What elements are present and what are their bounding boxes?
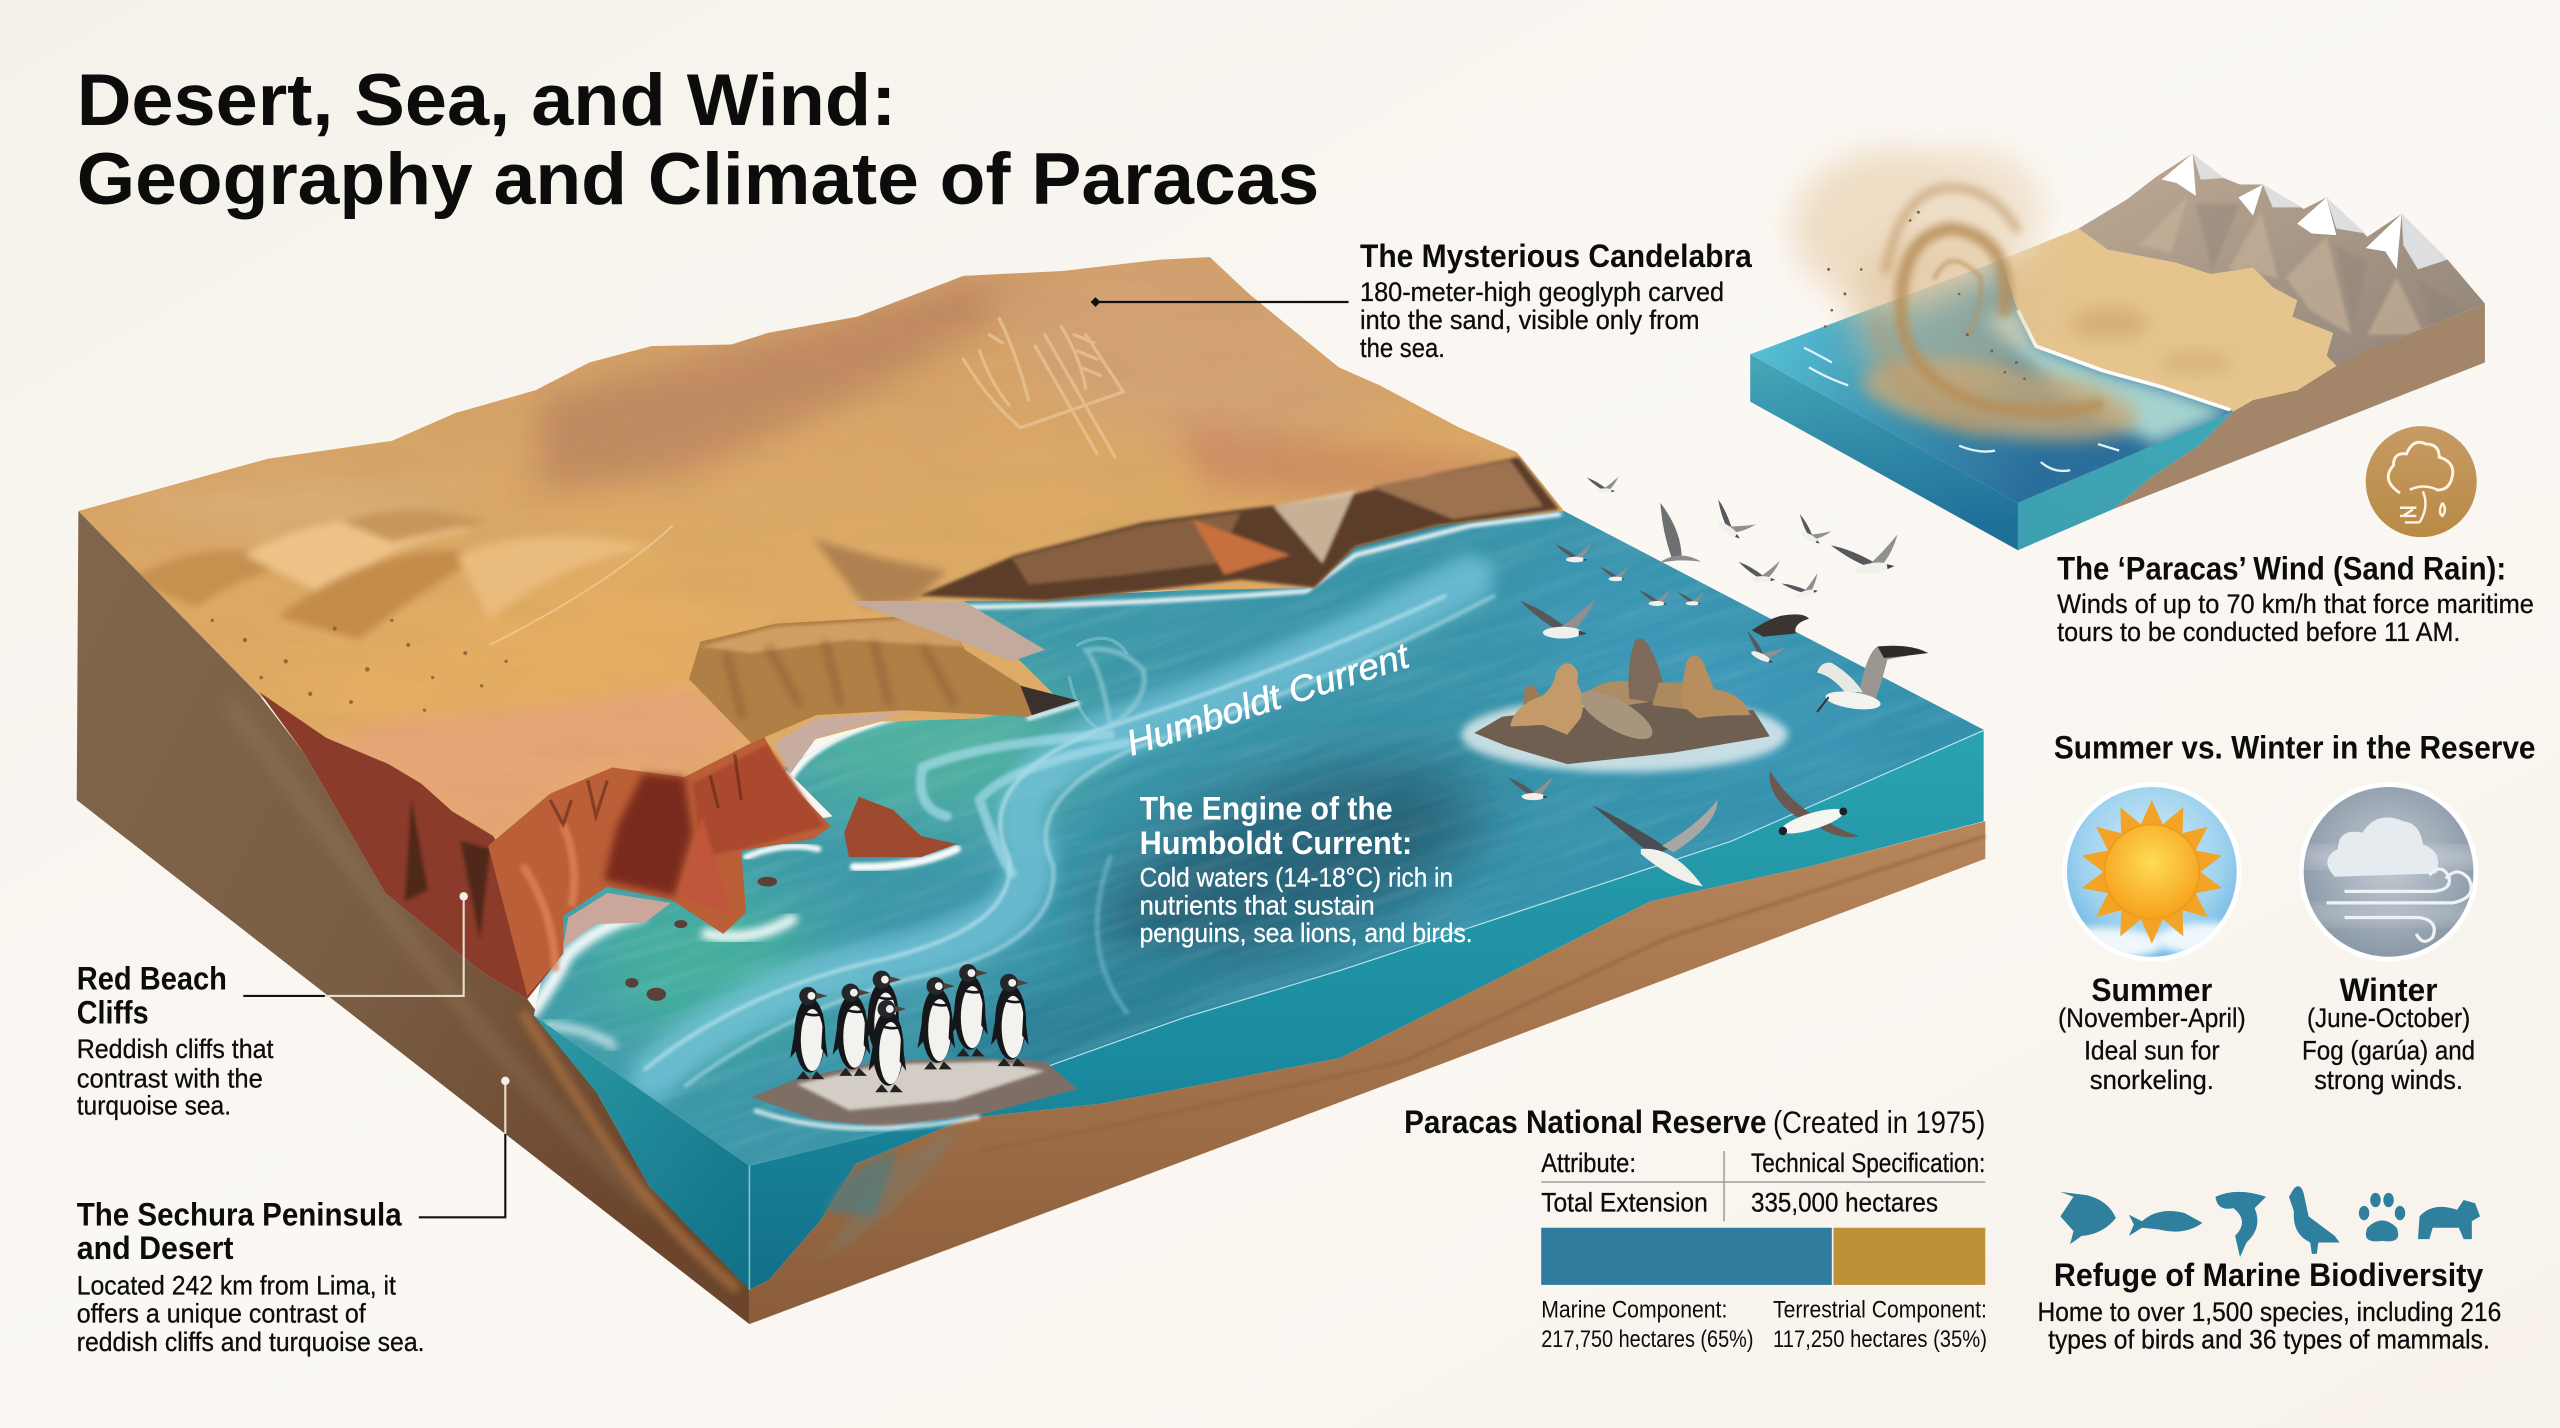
callout: red beach cliffs <box>77 959 274 1121</box>
callout: red beach cliffs: Reddish cliffs that <box>77 1034 274 1064</box>
callout: the Paracas wind: The ‘Paracas’ Wind (Sand Rain): <box>2057 550 2506 587</box>
specification table: Attribute: <box>1541 1148 1636 1178</box>
text block: engine of the Humboldt Current: penguins, sea lions, and birds. <box>1140 918 1473 948</box>
mountain ridge shading <box>2139 196 2424 335</box>
mini sand top <box>2002 229 2336 411</box>
red beach cliffs <box>260 692 908 999</box>
stacked bar <box>1541 1228 1985 1285</box>
Humboldt current swirls <box>645 580 1494 1086</box>
large bird over water edge <box>1770 771 1860 839</box>
leader line: Sechura peninsula <box>419 1077 510 1217</box>
dune field <box>131 510 653 640</box>
land surface <box>78 257 1564 840</box>
middle cliff headland <box>689 539 1078 743</box>
bar legend: marine: Marine Component: <box>1541 1298 1727 1324</box>
callout: the mysterious candelabra: 180-meter-high geoglyph carved <box>1360 277 1724 307</box>
large diving bird centre <box>1592 800 1718 887</box>
bar legend: terrestrial: Terrestrial Component: <box>1773 1298 1987 1324</box>
icons: wildlife row <box>2060 1186 2480 1257</box>
specification table: Technical Specification: <box>1751 1148 1985 1178</box>
callout: red beach cliffs: contrast with the <box>77 1063 263 1093</box>
callout: Sechura peninsula and desert <box>77 1195 424 1357</box>
text: winter <box>2302 971 2475 1095</box>
text: winter: Winter <box>2340 971 2438 1008</box>
leader line: candelabra <box>1091 297 1349 307</box>
panel: Paracas National Reserve <box>1404 1103 1987 1353</box>
snow caps <box>2162 153 2402 269</box>
leader line: red beach cliffs <box>243 892 468 996</box>
sea floor strip <box>749 821 1985 1324</box>
text: refuge of marine biodiversity: Refuge of Marine Biodiversity <box>2054 1256 2483 1293</box>
mini block earth face <box>2113 304 2485 509</box>
icon: summer sun <box>2062 782 2242 962</box>
text block: engine of the Humboldt Current: Cold waters (14-18°C) rich in <box>1140 863 1453 893</box>
large gliding bird right <box>1817 646 1928 712</box>
mini water faces <box>1750 354 2018 550</box>
callout: red beach cliffs: turquoise sea. <box>77 1091 231 1121</box>
callout: Sechura peninsula and desert: offers a unique contrast of <box>77 1298 366 1328</box>
inset: sand storm block <box>1750 150 2485 550</box>
bar legend: marine: 217,750 hectares (65%) <box>1541 1327 1753 1353</box>
reserve heading <box>1404 1103 1985 1140</box>
bar legend: terrestrial <box>1773 1298 1987 1353</box>
small rocks in surf <box>625 877 777 1001</box>
back dark cliffs <box>919 457 1559 601</box>
text: summer: snorkeling. <box>2090 1065 2214 1095</box>
penguins on rock island <box>751 964 1078 1128</box>
callout: the mysterious candelabra <box>1360 237 1753 363</box>
candelabra geoglyph <box>963 318 1123 457</box>
text: summer <box>2058 971 2246 1095</box>
icon: winter cloud and wind <box>2299 782 2482 962</box>
text block: engine of the Humboldt Current: nutrients that sustain <box>1140 890 1375 920</box>
specification table: Total Extension <box>1541 1187 1708 1217</box>
text: summer: Summer <box>2091 971 2213 1008</box>
bar legend: terrestrial: 117,250 hectares (35%) <box>1773 1327 1987 1353</box>
callout: the mysterious candelabra: the sea. <box>1360 333 1445 363</box>
text: refuge of marine biodiversity <box>2038 1256 2501 1355</box>
text: refuge of marine biodiversity: Home to over 1,500 species, including 216 <box>2038 1297 2501 1327</box>
text block: engine of the Humboldt Current <box>1140 790 1473 948</box>
main 3D block illustration <box>65 181 2118 1406</box>
offshore red sea stack <box>844 797 957 857</box>
text: winter: (June-October) <box>2307 1003 2470 1033</box>
text: winter: strong winds. <box>2314 1065 2463 1095</box>
title: Geography and Climate of Paracas <box>77 137 1319 220</box>
text: summer: Ideal sun for <box>2084 1036 2220 1066</box>
reserve heading: (Created in 1975) <box>1773 1105 1985 1140</box>
reserve heading: Paracas National Reserve <box>1404 1103 1767 1140</box>
sea surface <box>534 511 1984 1166</box>
icon: sand rain badge <box>2366 426 2477 537</box>
lit red cliff <box>488 736 831 996</box>
specification table: 335,000 hectares <box>1751 1187 1938 1217</box>
water front face <box>749 730 1984 1290</box>
scattered desert dots <box>211 619 508 712</box>
text: summer: (November-April) <box>2058 1003 2246 1033</box>
callout: red beach cliffs: Cliffs <box>77 994 149 1031</box>
text block: engine of the Humboldt Current: Humboldt Current: <box>1140 824 1412 861</box>
flock of birds <box>1508 477 1928 887</box>
callout: the Paracas wind <box>2057 550 2534 647</box>
callout: Sechura peninsula and desert: The Sechura Peninsula <box>77 1195 402 1232</box>
callout: the mysterious candelabra: The Mysterious Candelabra <box>1360 237 1753 274</box>
shoreline foam <box>532 514 1559 1045</box>
callout: the Paracas wind: Winds of up to 70 km/h that force maritime <box>2057 589 2534 619</box>
text: winter: Fog (garúa) and <box>2302 1036 2475 1066</box>
title: Desert, Sea, and Wind: <box>77 58 896 141</box>
bar legend: marine <box>1541 1298 1753 1353</box>
mini sea top <box>1750 260 2233 503</box>
text: refuge of marine biodiversity: types of birds and 36 types of mammals. <box>2048 1325 2490 1355</box>
text block: engine of the Humboldt Current: The Engine of the <box>1140 790 1393 827</box>
pale beach shelves <box>563 893 671 947</box>
callout: the mysterious candelabra: into the sand, visible only from <box>1360 305 1700 335</box>
callout: Sechura peninsula and desert: and Desert <box>77 1229 234 1266</box>
shadowed left cliff face <box>260 692 563 999</box>
sea lions on rock <box>1461 638 1788 772</box>
current label: Humboldt Current <box>1121 634 1416 764</box>
title <box>77 58 1319 220</box>
water left face <box>534 1016 749 1290</box>
block left face: earth cross-section <box>77 511 749 1324</box>
mountains <box>2078 153 2485 366</box>
callout: Sechura peninsula and desert: reddish cliffs and turquoise sea. <box>77 1327 424 1357</box>
callout: the Paracas wind: tours to be conducted before 11 AM. <box>2057 617 2460 647</box>
specification table <box>1541 1148 1985 1221</box>
sand swirl cloud <box>1793 150 1995 307</box>
callout: red beach cliffs: Red Beach <box>77 959 227 996</box>
callout: Sechura peninsula and desert: Located 242 km from Lima, it <box>77 1271 396 1301</box>
